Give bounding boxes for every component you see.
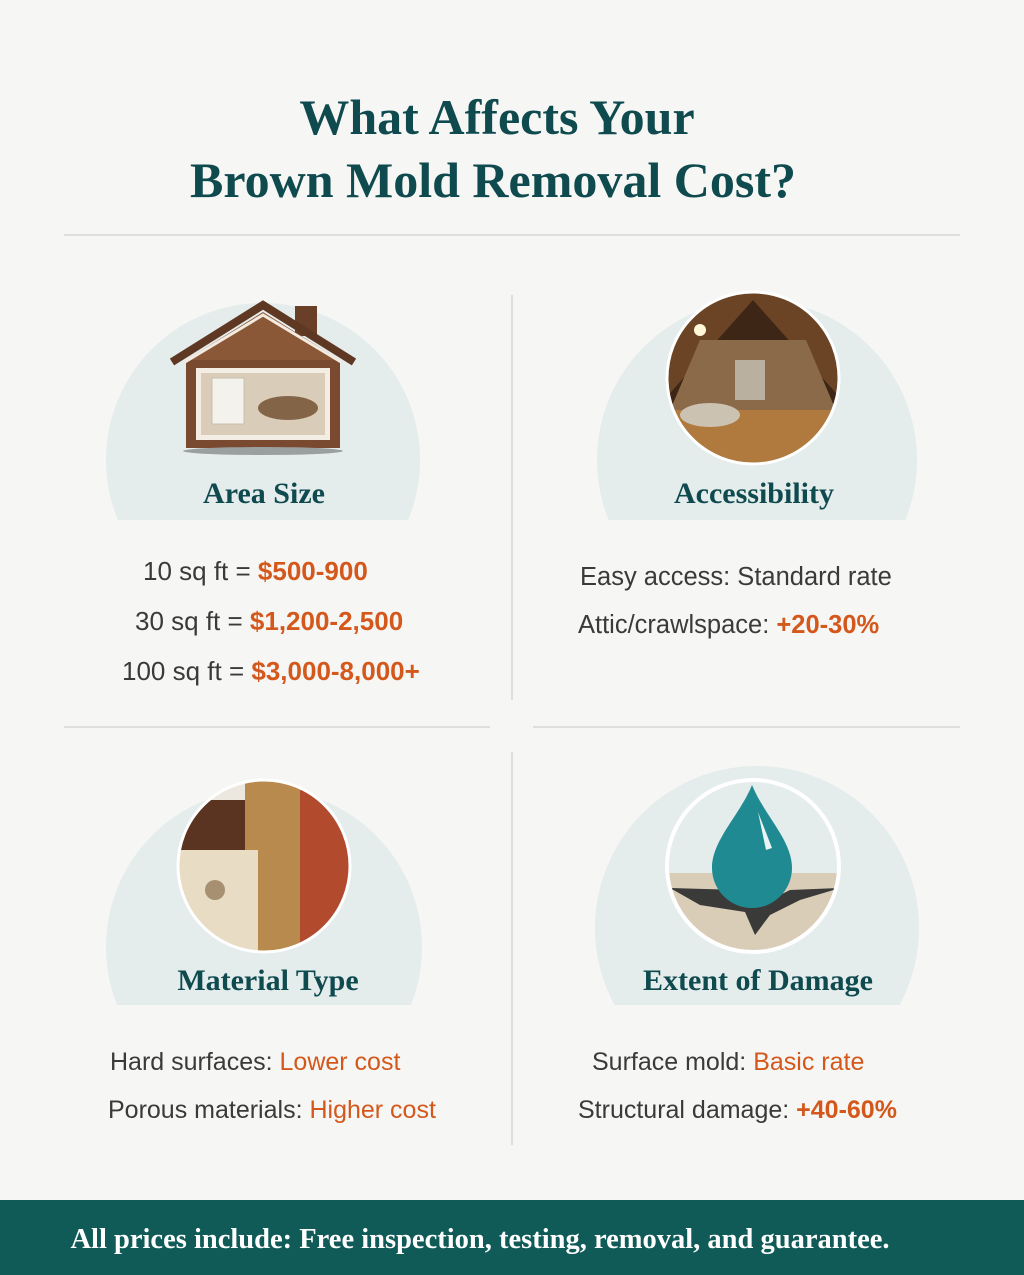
icon: materials bbox=[180, 782, 348, 950]
icon: attic bbox=[668, 294, 838, 462]
text: damage rates: Structural damage: +40-60% bbox=[578, 1096, 897, 1124]
title bbox=[190, 89, 796, 208]
text: material costs bbox=[108, 1048, 436, 1124]
text: accessibility rates: Attic/crawlspace: +20-30% bbox=[578, 611, 879, 639]
text: damage rates bbox=[578, 1048, 897, 1124]
panel: accessibility bbox=[597, 290, 917, 520]
icon: house bbox=[172, 305, 354, 455]
heading: accessibility: Accessibility bbox=[674, 477, 834, 510]
heading: material type: Material Type bbox=[177, 964, 359, 997]
text: area size prices: 10 sq ft = $500-900 bbox=[143, 556, 368, 586]
text: accessibility rates bbox=[578, 563, 892, 639]
text: area size prices: 30 sq ft = $1,200-2,500 bbox=[135, 606, 403, 636]
title: Brown Mold Removal Cost? bbox=[190, 152, 796, 208]
text: area size prices: 100 sq ft = $3,000-8,000+ bbox=[122, 656, 420, 686]
heading: area size: Area Size bbox=[203, 477, 325, 510]
footer banner bbox=[0, 1200, 1024, 1275]
panel: material type bbox=[106, 778, 422, 1005]
text: material costs: Porous materials: Higher cost bbox=[108, 1096, 436, 1124]
text: material costs: Hard surfaces: Lower cost bbox=[110, 1048, 400, 1076]
text: area size prices bbox=[122, 556, 420, 686]
text: damage rates: Surface mold: Basic rate bbox=[592, 1048, 864, 1076]
footer banner: All prices include: Free inspection, testing, removal, and guarantee. bbox=[70, 1224, 890, 1255]
title: What Affects Your bbox=[299, 89, 695, 145]
panel: extent of damage bbox=[595, 766, 919, 1005]
panel: area size bbox=[106, 300, 420, 520]
text: accessibility rates: Easy access: Standard rate bbox=[580, 563, 892, 591]
icon: water drop on cracked ground bbox=[665, 778, 841, 954]
heading: extent of damage: Extent of Damage bbox=[643, 964, 873, 997]
